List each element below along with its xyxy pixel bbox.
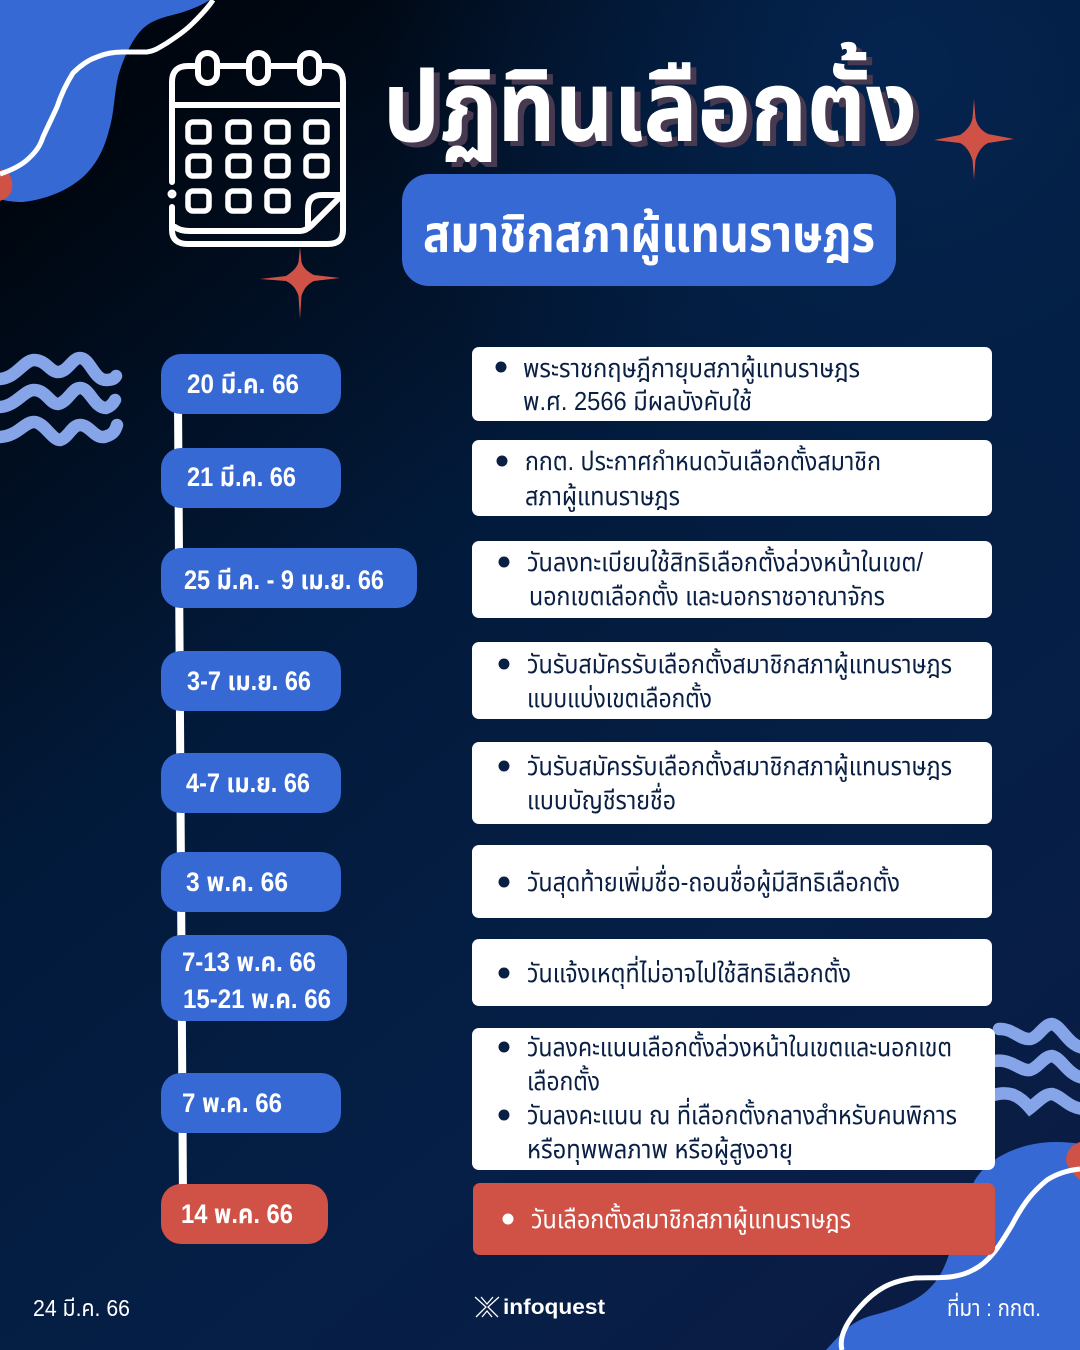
date: 3-7 เม.ย. 66: [161, 651, 341, 711]
date: 7-13 and 15-21 พ.ค. 66: [161, 935, 347, 1021]
card: party-list candidates: แบบบัญชีรายชื่อ: [527, 782, 676, 815]
card: advance registration: วันลงทะเบียนใช้สิทธิเลือกตั้งล่วงหน้าในเขต/: [527, 545, 924, 577]
date: 20 มี.ค. 66: 20 มี.ค. 66: [187, 369, 299, 399]
date: 20 มี.ค. 66: [161, 354, 341, 414]
subtitle pill: สมาชิกสภาผู้แทนราษฎร: [423, 206, 875, 266]
source: ที่มา : กกต.: [947, 1292, 1041, 1321]
timeline line: [178, 400, 183, 1200]
card: royal decree: พ.ศ. 2566 มีผลบังคับใช้: [523, 386, 752, 416]
title: ปฏิทินเลือกตั้ง: [383, 41, 917, 162]
card: constituency candidates: แบบแบ่งเขตเลือกตั้ง: [527, 681, 712, 713]
card: election date announcement: [472, 440, 992, 516]
card: advance registration: นอกเขตเลือกตั้ง และนอกราชอาณาจักร: [529, 579, 885, 611]
card: constituency candidates: [472, 642, 992, 719]
card: constituency candidates: วันรับสมัครรับเลือกตั้งสมาชิกสภาผู้แทนราษฎร: [527, 647, 952, 680]
date: 4-7 เม.ย. 66: 4-7 เม.ย. 66: [186, 768, 310, 798]
title: ปฏิทินเลือกตั้ง: [389, 46, 923, 167]
card: advance registration: [472, 541, 992, 618]
card: advance voting: หรือทุพพลภาพ หรือผู้สูงอายุ: [527, 1134, 793, 1165]
card: party-list candidates: [472, 742, 992, 824]
card: royal decree: [472, 347, 992, 421]
card: party-list candidates: วันรับสมัครรับเลือกตั้งสมาชิกสภาผู้แทนราษฎร: [527, 749, 952, 782]
card: voter list deadline: [472, 845, 992, 918]
infoquest logo: infoquest: [503, 1296, 605, 1319]
date: 3 พ.ค. 66: 3 พ.ค. 66: [186, 867, 288, 897]
decorative blob: top left: [0, 0, 213, 202]
sparkle: right of title: [934, 99, 1014, 180]
date: 3 พ.ค. 66: [161, 852, 341, 912]
card: election date announcement: สภาผู้แทนราษฎร: [525, 481, 680, 512]
date: 21 มี.ค. 66: [161, 448, 341, 508]
decorative blob: bottom right: [826, 1142, 1080, 1350]
card: election day: [473, 1183, 995, 1255]
sparkle: under calendar: [260, 247, 340, 319]
waves: right: [990, 1024, 1080, 1109]
date: 3-7 เม.ย. 66: 3-7 เม.ย. 66: [187, 666, 311, 696]
waves: left: [0, 358, 117, 440]
date: 21 มี.ค. 66: 21 มี.ค. 66: [187, 462, 296, 492]
card: royal decree: พระราชกฤษฎีกายุบสภาผู้แทนราษฎร: [523, 353, 860, 384]
card: election date announcement: กกต. ประกาศกำหนดวันเลือกตั้งสมาชิก: [525, 444, 881, 476]
date: 7 พ.ค. 66: [161, 1073, 341, 1133]
card: advance voting: [472, 1028, 995, 1170]
card: election day: วันเลือกตั้งสมาชิกสภาผู้แทนราษฎร: [531, 1202, 851, 1235]
date: 14 พ.ค. 66: [161, 1184, 328, 1244]
card: voter list deadline: วันสุดท้ายเพิ่มชื่อ-ถอนชื่อผู้มีสิทธิเลือกตั้ง: [527, 864, 900, 898]
date: 25 มี.ค. - 9 เม.ย. 66: 25 มี.ค. - 9 เม.ย. 66: [184, 565, 384, 595]
date: 4-7 เม.ย. 66: [161, 753, 341, 813]
subtitle pill: [402, 174, 896, 286]
card: advance voting: วันลงคะแนน ณ ที่เลือกตั้งกลางสำหรับคนพิการ: [527, 1097, 957, 1130]
icon: calendar: [170, 53, 343, 244]
card: notify reason: วันแจ้งเหตุที่ไม่อาจไปใช้สิทธิเลือกตั้ง: [527, 955, 851, 989]
card: advance voting: วันลงคะแนนเลือกตั้งล่วงหน้าในเขตและนอกเขต: [527, 1030, 952, 1062]
date: 7-13 and 15-21 พ.ค. 66: 15-21 พ.ค. 66: [183, 984, 331, 1014]
date: 7 พ.ค. 66: 7 พ.ค. 66: [182, 1088, 282, 1118]
card: notify reason: [472, 939, 992, 1006]
date: 25 มี.ค. - 9 เม.ย. 66: [161, 548, 417, 608]
date: 7-13 and 15-21 พ.ค. 66: 7-13 พ.ค. 66: [182, 947, 316, 977]
date: 14 พ.ค. 66: 14 พ.ค. 66: [181, 1199, 293, 1229]
publication date: 24 มี.ค. 66: [33, 1295, 130, 1321]
card: advance voting: เลือกตั้ง: [527, 1064, 600, 1096]
